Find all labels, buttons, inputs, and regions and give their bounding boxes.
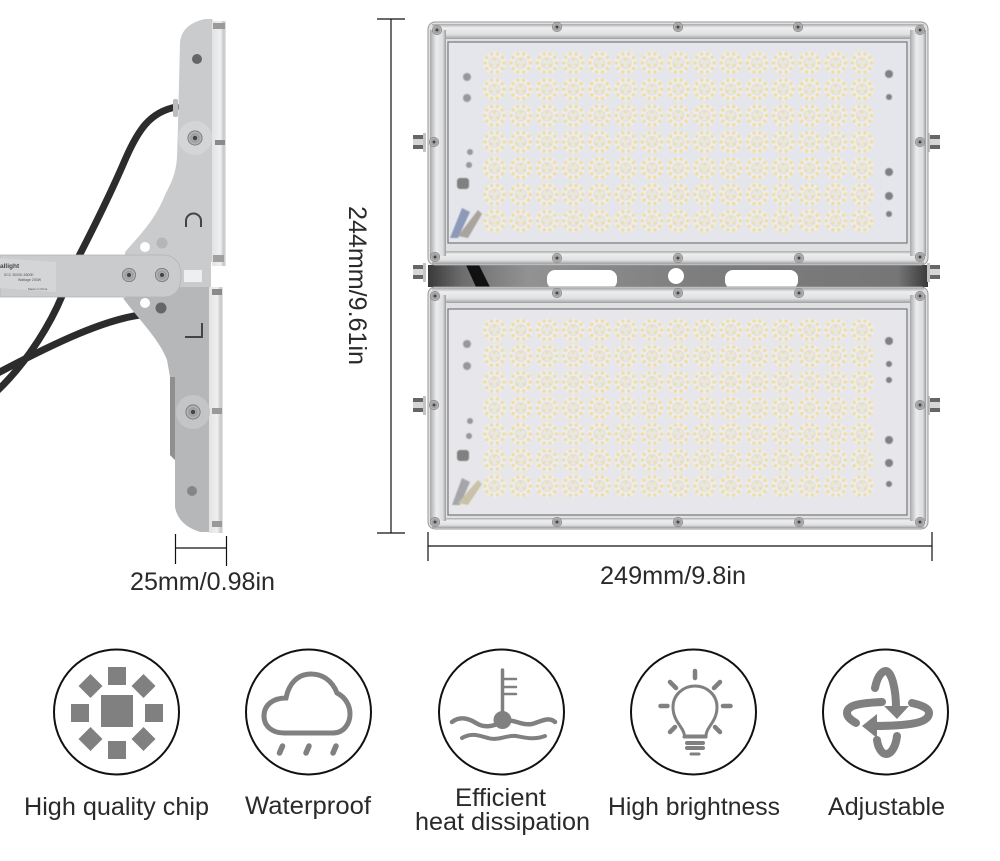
- lower left components: [452, 340, 482, 505]
- feature: adjustable: [823, 650, 948, 821]
- product label on arm: [0, 258, 56, 292]
- icon: chip: [54, 650, 179, 774]
- upper glass edge: [212, 21, 226, 266]
- upper right components: [885, 70, 893, 217]
- label: [415, 784, 590, 836]
- mounting arm: [0, 255, 181, 297]
- label: Efficient: [455, 784, 546, 812]
- product label on arm: Made in China: [28, 287, 48, 291]
- width label: 249mm/9.8in: [600, 562, 746, 590]
- label: Adjustable: [828, 793, 945, 821]
- panel screws: [429, 22, 925, 527]
- label: heat dissipation: [415, 808, 590, 836]
- side bolts: [122, 121, 212, 429]
- icon: rotation arrows: [823, 650, 948, 774]
- upper left components: [450, 73, 482, 238]
- upper lamp panel: [428, 22, 928, 265]
- feature: high quality chip: [24, 650, 209, 821]
- lower lamp panel: [428, 287, 928, 529]
- lower glass cover: [448, 309, 907, 515]
- dimension: height: [377, 19, 405, 533]
- label: High brightness: [608, 793, 780, 821]
- height label: 244mm/9.61in: [343, 206, 371, 365]
- upper glass cover: [448, 42, 907, 243]
- dimension: depth: [175, 534, 226, 566]
- body holes and marks: [140, 54, 202, 496]
- feature: high brightness: [608, 650, 780, 821]
- depth label: 25mm/0.98in: [130, 568, 275, 596]
- dimension: width: [428, 532, 932, 561]
- side view of floodlight: [0, 19, 226, 533]
- power cables: [0, 107, 176, 392]
- upper lamp body: [125, 19, 223, 298]
- centre hinge band: [428, 265, 928, 289]
- cable nut: [173, 99, 178, 117]
- lower glass edge: [209, 287, 223, 533]
- label: Waterproof: [245, 792, 371, 820]
- icon: light bulb: [631, 650, 756, 774]
- product label on arm: allight: [0, 263, 20, 270]
- icon: thermometer in water: [439, 650, 564, 774]
- feature: waterproof: [245, 650, 371, 820]
- label: High quality chip: [24, 793, 209, 821]
- icon: rain cloud: [246, 650, 371, 774]
- upper LED array: [482, 50, 875, 234]
- side latches: [413, 133, 940, 415]
- product label on arm: Wattage 200W: [18, 278, 42, 282]
- lower lamp body: [123, 287, 212, 532]
- front view of floodlight: [413, 22, 940, 529]
- lower right components: [885, 337, 893, 487]
- product label on arm: SCC 3000K-6500K: [4, 273, 34, 277]
- feature: efficient heat dissipation: [415, 650, 590, 836]
- lower LED array: [482, 317, 875, 499]
